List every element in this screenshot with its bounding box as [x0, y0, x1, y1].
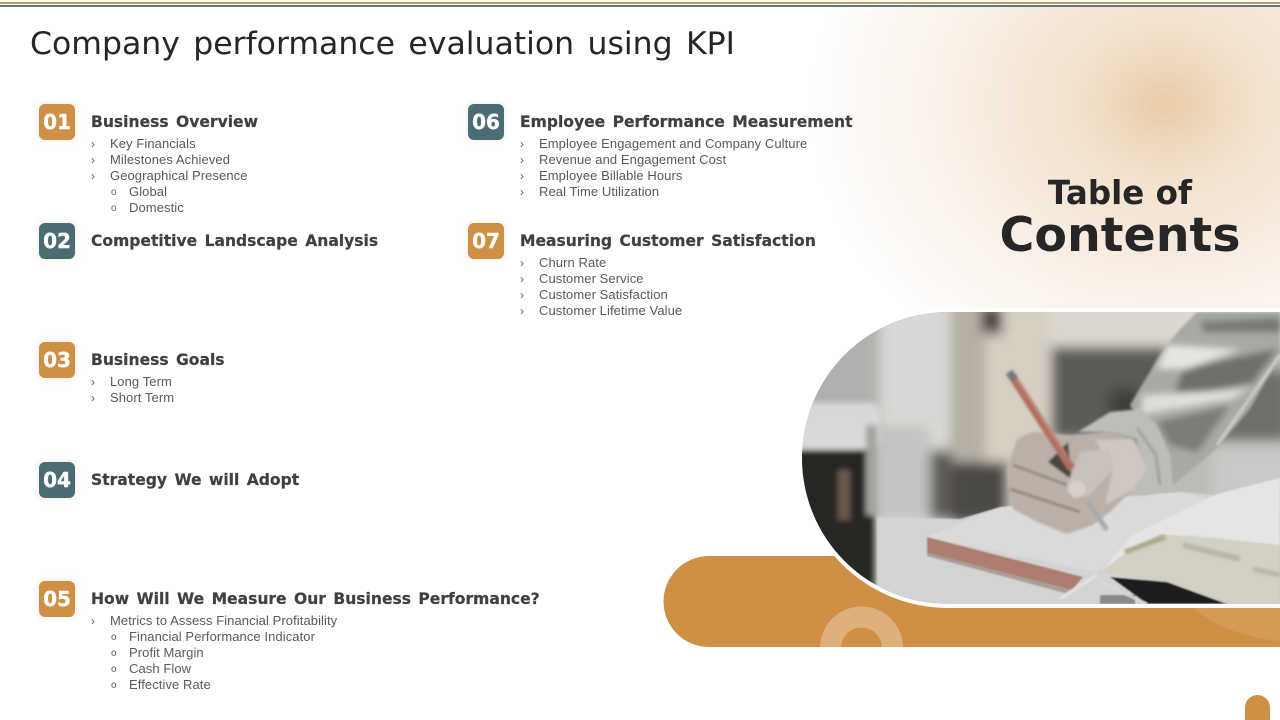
badge 07: 07 — [472, 229, 500, 253]
title: Company performance evaluation using KPI — [30, 26, 735, 62]
table and book — [877, 478, 1280, 610]
list 06: › — [520, 137, 524, 151]
orange band — [664, 556, 1280, 647]
background glow — [800, 6, 1280, 310]
list 05: Financial Performance Indicator — [129, 629, 315, 644]
list 03: › — [91, 391, 95, 405]
list 05: o — [111, 664, 117, 675]
list 05 — [91, 613, 337, 692]
printed text smudges — [1125, 537, 1280, 575]
badge 04: 04 — [43, 468, 71, 492]
section 04 — [36, 460, 299, 500]
badge 07 — [468, 223, 504, 259]
section 03 — [36, 340, 225, 405]
list 01 — [91, 136, 248, 215]
list 07: › — [520, 272, 524, 286]
badge 01 — [39, 104, 75, 140]
tab bottom right — [1245, 695, 1270, 720]
badge 03 — [39, 342, 75, 378]
photo — [790, 300, 1280, 610]
section 05 — [36, 578, 540, 692]
section 07 — [466, 220, 816, 318]
list 05: Cash Flow — [129, 661, 191, 676]
graphic: orange band and photo — [664, 308, 1280, 647]
heading 05: How Will We Measure Our Business Performance? — [91, 590, 540, 608]
list 07: Churn Rate — [539, 255, 606, 270]
list 01: o — [111, 187, 117, 198]
list 03: Short Term — [110, 390, 174, 405]
list 01: Geographical Presence — [110, 168, 248, 183]
heading: table of contents: Contents — [999, 208, 1241, 263]
list 01: › — [91, 169, 95, 183]
heading: table of contents: Table of — [1048, 174, 1192, 212]
list 07: Customer Lifetime Value — [539, 303, 682, 318]
heading 03: Business Goals — [91, 351, 225, 369]
list 01: › — [91, 153, 95, 167]
badge 04 — [39, 462, 75, 498]
heading 01: Business Overview — [91, 113, 258, 131]
list 05: Effective Rate — [129, 677, 211, 692]
list 05: Metrics to Assess Financial Profitability — [110, 613, 337, 628]
corner shade — [1194, 608, 1280, 641]
cuff — [1078, 409, 1173, 495]
thumb — [1067, 449, 1113, 499]
list 05: o — [111, 648, 117, 659]
badge 06 — [468, 104, 504, 140]
section 02 — [36, 220, 378, 262]
photo outline — [798, 308, 1280, 608]
badge 02: 02 — [43, 229, 71, 253]
badge 05: 05 — [43, 587, 71, 611]
list 05: o — [111, 680, 117, 691]
list 01: Milestones Achieved — [110, 152, 230, 167]
list 07: › — [520, 256, 524, 270]
badge 06: 06 — [472, 110, 500, 134]
list 01: Global — [129, 184, 167, 199]
list 05: o — [111, 632, 117, 643]
list 07: Customer Satisfaction — [539, 287, 668, 302]
mug — [790, 403, 880, 449]
list 03: Long Term — [110, 374, 172, 389]
list 06 — [520, 136, 807, 199]
list 03 — [91, 374, 174, 405]
list 03: › — [91, 375, 95, 389]
heading 07: Measuring Customer Satisfaction — [520, 232, 816, 250]
list 06: › — [520, 153, 524, 167]
list 05: Profit Margin — [129, 645, 204, 660]
list 06: › — [520, 185, 524, 199]
badge 01: 01 — [43, 110, 71, 134]
list 06: Employee Engagement and Company Culture — [539, 136, 807, 151]
ring motif — [820, 606, 903, 647]
list 07: Customer Service — [539, 271, 644, 286]
sweater sleeve — [1130, 312, 1280, 485]
section 01 — [36, 102, 258, 215]
heading 02: Competitive Landscape Analysis — [91, 232, 378, 250]
heading 06: Employee Performance Measurement — [520, 113, 853, 131]
pen — [1012, 376, 1072, 469]
section 06 — [466, 102, 853, 199]
badge 03: 03 — [43, 348, 71, 372]
badge 02 — [39, 223, 75, 259]
top rule — [0, 2, 1280, 7]
list 06: Employee Billable Hours — [539, 168, 682, 183]
hand — [1007, 432, 1147, 534]
heading 04: Strategy We will Adopt — [91, 471, 299, 489]
list 07: › — [520, 288, 524, 302]
list 07 — [520, 255, 682, 318]
list 07: › — [520, 304, 524, 318]
list 06: Revenue and Engagement Cost — [539, 152, 726, 167]
list 01: › — [91, 137, 95, 151]
list 06: Real Time Utilization — [539, 184, 659, 199]
heading: table of contents — [999, 174, 1241, 263]
list 05: › — [91, 614, 95, 628]
list 01: Domestic — [129, 200, 184, 215]
badge 05 — [39, 581, 75, 617]
list 01: o — [111, 203, 117, 214]
list 06: › — [520, 169, 524, 183]
list 01: Key Financials — [110, 136, 196, 151]
